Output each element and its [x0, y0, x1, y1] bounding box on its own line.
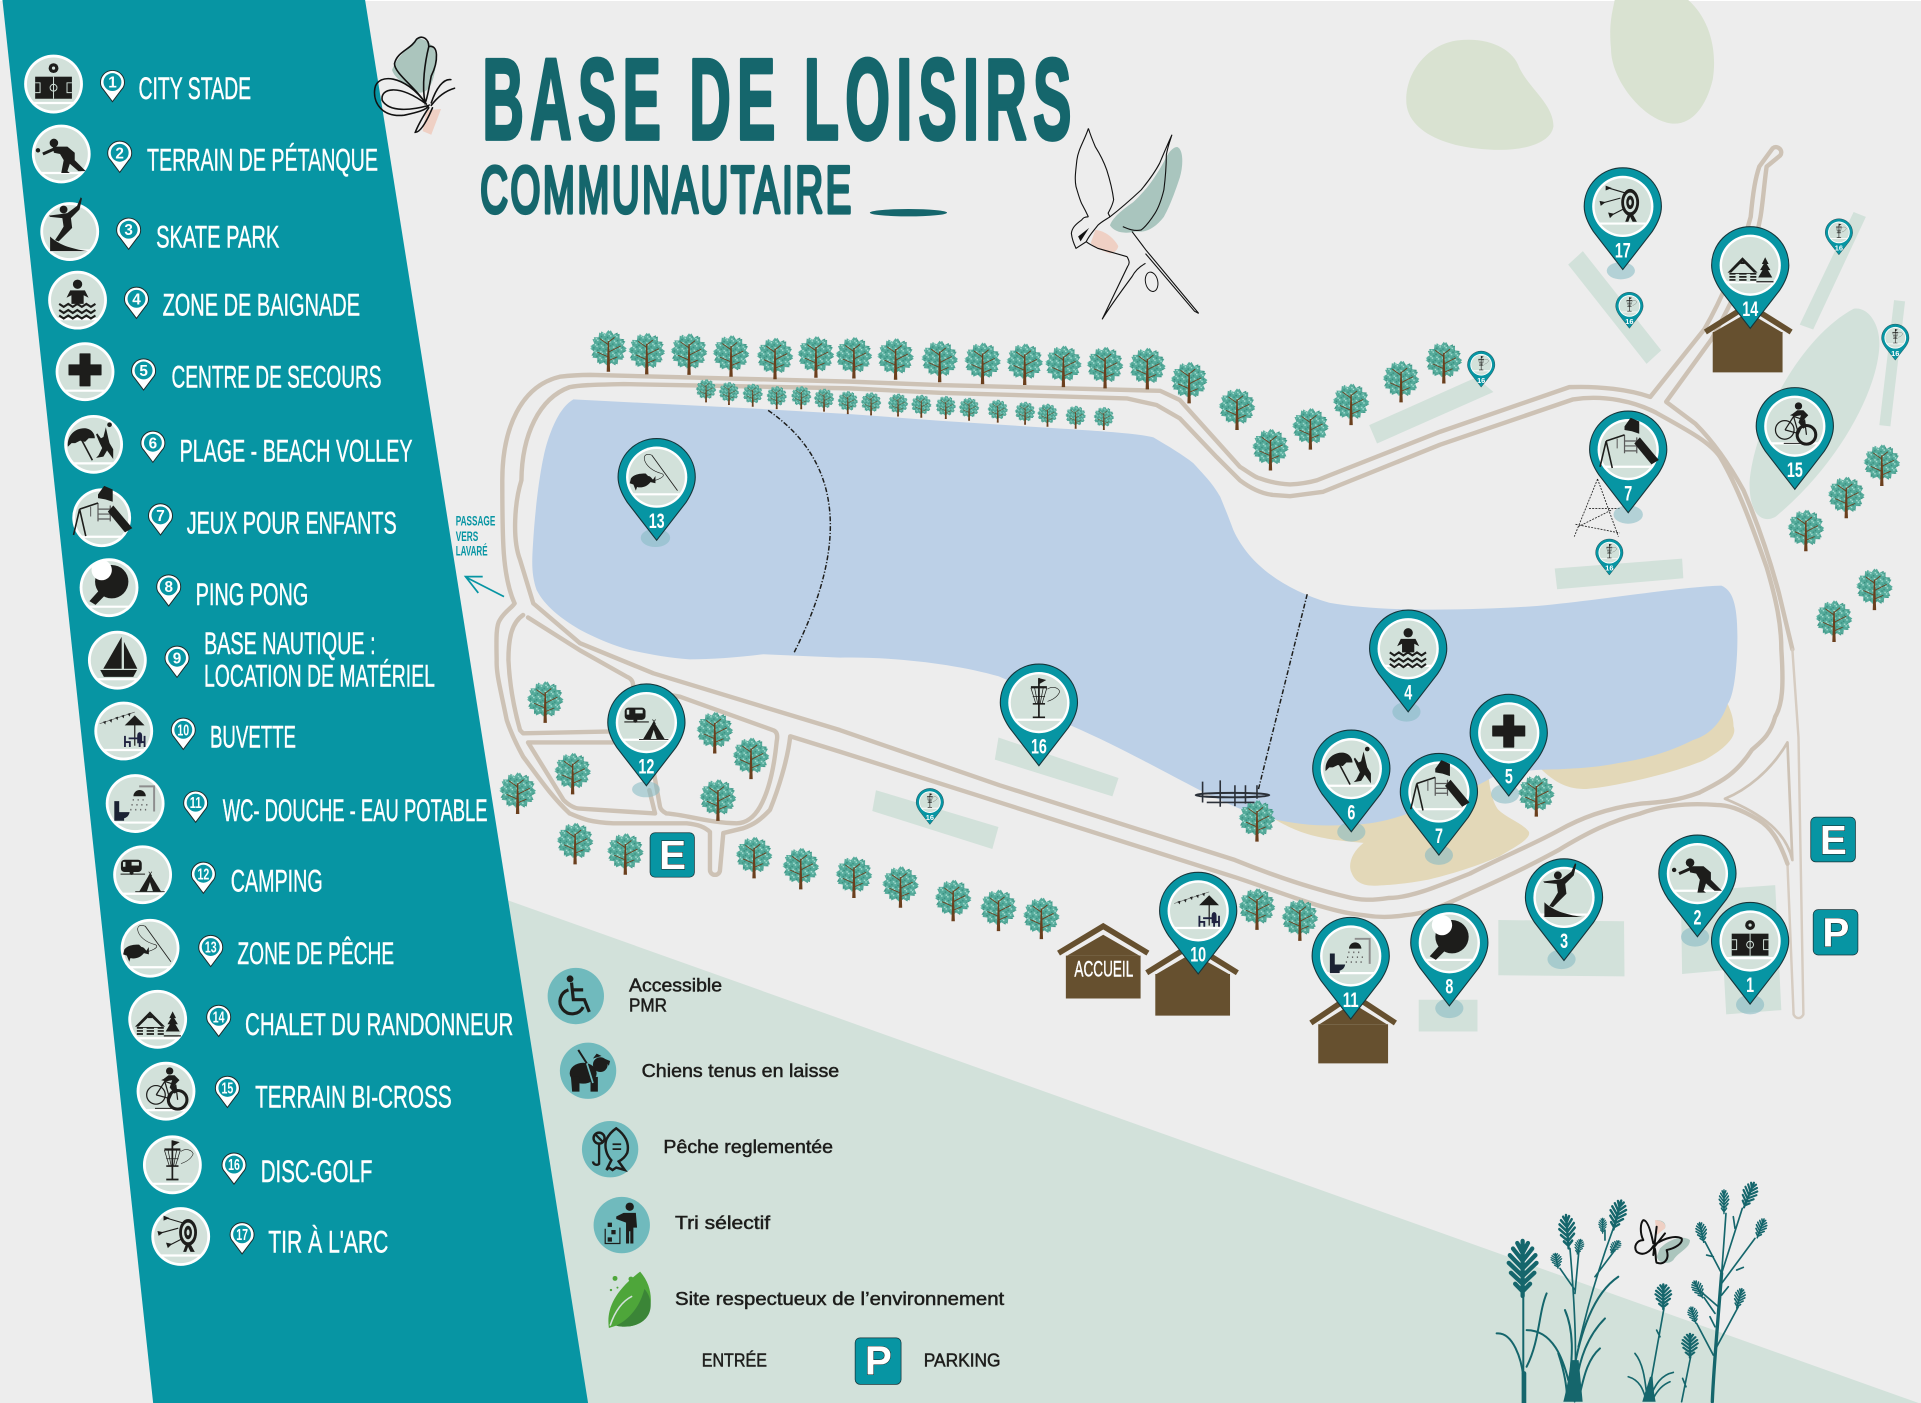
text: pêche: Pêche reglementée — [663, 1136, 833, 1157]
pin 15: 15 — [1787, 459, 1803, 482]
text: accessible PMR — [629, 975, 722, 1016]
cabin sanitaires — [1311, 995, 1395, 1063]
pin 11 — [1312, 917, 1389, 1019]
pin 5: 5 — [1505, 766, 1513, 789]
disc-golf marker top — [1616, 292, 1643, 328]
legend item 17: tir à l'arc — [151, 1207, 388, 1266]
legend item 1: city stade: 1 — [108, 75, 117, 92]
legend item 11: wc douche: WC- DOUCHE - EAU POTABLE — [223, 792, 488, 828]
subtitle: COMMUNAUTAIRE — [480, 154, 851, 227]
legend item 15: bi-cross: 15 — [222, 1080, 234, 1097]
disc-golf marker centre: 16 — [1605, 564, 1613, 573]
legend item 11: wc douche: 11 — [190, 795, 202, 812]
services legend — [548, 968, 1004, 1384]
lake — [532, 399, 1737, 825]
pin 11: 11 — [1343, 989, 1359, 1012]
legend item 3: skate park: 3 — [124, 222, 133, 239]
passage text — [456, 514, 495, 558]
parking box east: P — [1822, 909, 1849, 955]
pin shadows — [632, 262, 1764, 1018]
play tower dotted structure — [1574, 479, 1620, 537]
cabin accueil — [1059, 926, 1148, 998]
text: chiens: Chiens tenus en laisse — [642, 1060, 839, 1081]
cabin buvette — [1147, 945, 1237, 1016]
top edge strip — [0, 0, 1921, 2]
butterfly illustration top — [375, 37, 455, 135]
legend item 12: camping: 12 — [197, 866, 209, 883]
legend item 6: plage — [64, 415, 413, 474]
text: site: Site respectueux de l’environnement — [675, 1288, 1004, 1309]
disc-golf marker south — [916, 788, 944, 825]
pin 17 — [1584, 168, 1661, 270]
disc-golf marker north road: 16 — [1477, 376, 1485, 385]
pin 14: 14 — [1742, 298, 1758, 321]
dashed swimming limit line — [1258, 594, 1307, 790]
legend item 8: ping pong: 8 — [164, 579, 173, 596]
pale green blob top right — [1610, 0, 1714, 124]
parking box legend: P — [865, 1338, 892, 1384]
legend item 9: base nautique: 9 — [173, 650, 181, 667]
disc-golf marker far right — [1882, 324, 1909, 360]
legend item 11: wc douche — [106, 774, 488, 833]
legend item 15: bi-cross: TERRAIN BI-CROSS — [255, 1079, 452, 1115]
legend item 9: base nautique: LOCATION DE MATÉRIEL — [204, 658, 435, 694]
pin 10: 10 — [1190, 944, 1206, 967]
disc-golf marker centre — [1596, 539, 1623, 575]
legend list — [24, 55, 513, 1266]
pin 4: 4 — [1404, 682, 1412, 705]
pin 1 — [1712, 902, 1789, 1004]
pin 8 — [1411, 904, 1488, 1006]
parking box legend — [855, 1338, 901, 1384]
pin 2: 2 — [1693, 906, 1701, 929]
legend item 9: base nautique — [88, 625, 435, 694]
pin 10 — [1160, 872, 1237, 974]
pin 2 — [1659, 835, 1736, 937]
legend item 5: secours — [56, 342, 382, 401]
legend item 2: pétanque: TERRAIN DE PÉTANQUE — [147, 142, 378, 178]
pin 8: 8 — [1445, 976, 1453, 999]
arrow to Lavaré — [466, 577, 504, 597]
legend item 1: city stade — [24, 55, 251, 113]
passage text: VERS — [456, 529, 478, 544]
pin 12: 12 — [638, 755, 654, 778]
pin 6 — [1313, 730, 1390, 832]
passage text: PASSAGE — [456, 514, 495, 529]
icon: leaf — [608, 1272, 651, 1328]
disc-golf marker far right: 16 — [1891, 349, 1899, 358]
pale green blob top — [1406, 40, 1553, 150]
legend item 4: baignade — [48, 271, 360, 330]
parking box east — [1813, 909, 1858, 955]
pin 4 — [1370, 610, 1447, 712]
pin 17: 17 — [1615, 239, 1631, 262]
pin 7 south — [1400, 753, 1478, 855]
beach sand — [1262, 698, 1734, 886]
legend item 6: plage: 6 — [149, 435, 157, 452]
disc-golf marker top right: 16 — [1835, 243, 1843, 252]
pin 13 — [618, 439, 695, 540]
text: parking: PARKING — [924, 1350, 1001, 1371]
pin 7 north — [1590, 411, 1667, 513]
pin 3 — [1525, 859, 1603, 960]
legend item 9: base nautique: BASE NAUTIQUE : — [204, 625, 376, 661]
pin 16 — [1000, 664, 1077, 766]
pin 6: 6 — [1347, 801, 1355, 824]
pin 7 north: 7 — [1624, 482, 1632, 505]
legend item 4: baignade: ZONE DE BAIGNADE — [163, 287, 360, 323]
plants bottom right — [1497, 1180, 1769, 1403]
legend item 13: pêche: 13 — [205, 940, 217, 957]
legend item 10: buvette — [94, 702, 296, 760]
legend item 7: jeux — [72, 486, 397, 547]
legend item 2: pétanque — [32, 125, 378, 183]
swallow bird illustration — [1071, 128, 1199, 319]
text: accessible PMR: Accessible — [629, 975, 722, 996]
roads — [496, 147, 1803, 1018]
entrance box east — [1811, 817, 1855, 863]
legend item 2: pétanque: 2 — [115, 145, 124, 162]
text: accessible PMR: PMR — [629, 995, 667, 1016]
entrance box south: E — [659, 832, 686, 878]
disc-golf marker top right — [1825, 219, 1853, 255]
legend item 6: plage: PLAGE - BEACH VOLLEY — [180, 433, 413, 469]
disc-golf marker north road — [1467, 351, 1495, 387]
legend item 15: bi-cross — [137, 1062, 452, 1121]
legend item 16: disc-golf — [143, 1135, 372, 1194]
small butterfly bottom right — [1635, 1220, 1690, 1263]
legend item 17: tir à l'arc: TIR À L'ARC — [268, 1224, 388, 1260]
icon: dog on leash — [560, 1043, 616, 1099]
legend item 10: buvette: 10 — [177, 722, 189, 739]
legend item 5: secours: CENTRE DE SECOURS — [172, 358, 382, 394]
legend item 1: city stade: CITY STADE — [138, 70, 251, 106]
map pins — [608, 168, 1833, 1019]
jetty / dock — [1196, 780, 1269, 807]
pin 1: 1 — [1746, 974, 1754, 997]
pin 14 — [1712, 227, 1789, 328]
legend item 10: buvette: BUVETTE — [210, 718, 296, 754]
pin 13: 13 — [649, 510, 665, 533]
legend item 14: chalet: CHALET DU RANDONNEUR — [245, 1006, 513, 1042]
green wedge behind the lower legend — [508, 900, 1919, 1403]
title underline dash — [870, 209, 947, 216]
legend item 7: jeux: JEUX POUR ENFANTS — [187, 504, 397, 540]
pin 5 — [1470, 694, 1547, 796]
icon: regulated fishing — [582, 1121, 638, 1177]
teal legend panel — [2, 0, 588, 1403]
legend item 16: disc-golf: DISC-GOLF — [261, 1153, 372, 1189]
legend item 5: secours: 5 — [139, 363, 148, 380]
legend item 3: skate park: SKATE PARK — [156, 218, 279, 254]
cabin chalet — [1705, 305, 1791, 372]
text: entrée: ENTRÉE — [702, 1350, 767, 1371]
legend item 8: ping pong — [80, 558, 308, 617]
legend item 4: baignade: 4 — [132, 291, 141, 308]
legend item 14: chalet: 14 — [213, 1009, 225, 1026]
trees — [497, 328, 1902, 941]
dashed fishing limit line — [768, 410, 830, 653]
legend item 17: tir à l'arc: 17 — [236, 1227, 248, 1244]
cabin accueil: ACCUEIL — [1074, 956, 1133, 981]
text: tri: Tri sélectif — [675, 1212, 771, 1233]
pin 15 — [1756, 388, 1833, 489]
pin 12 — [608, 684, 685, 786]
icon: accessible — [548, 968, 604, 1024]
entrance box south — [650, 832, 694, 878]
entrance box east: E — [1820, 817, 1847, 863]
legend item 13: pêche: ZONE DE PÊCHE — [237, 935, 394, 971]
title: BASE DE LOISIRS — [482, 37, 1071, 164]
passage text: LAVARÉ — [456, 543, 488, 558]
legend item 13: pêche — [121, 919, 394, 978]
legend item 16: disc-golf: 16 — [228, 1157, 240, 1174]
disc-golf marker top: 16 — [1625, 317, 1634, 326]
legend item 3: skate park — [40, 197, 279, 261]
pin 3: 3 — [1560, 930, 1568, 953]
legend item 12: camping — [113, 845, 323, 904]
legend item 7: jeux: 7 — [156, 508, 165, 525]
pin 16: 16 — [1031, 735, 1047, 758]
legend item 12: camping: CAMPING — [231, 863, 323, 899]
icon: waste sorting — [594, 1197, 650, 1253]
pin 7 south: 7 — [1435, 825, 1443, 848]
disc-golf marker south: 16 — [926, 813, 934, 822]
legend item 14: chalet — [128, 990, 513, 1049]
small disc-golf markers — [916, 219, 1909, 825]
green activity zones — [872, 212, 1905, 1032]
legend item 8: ping pong: PING PONG — [196, 576, 308, 612]
